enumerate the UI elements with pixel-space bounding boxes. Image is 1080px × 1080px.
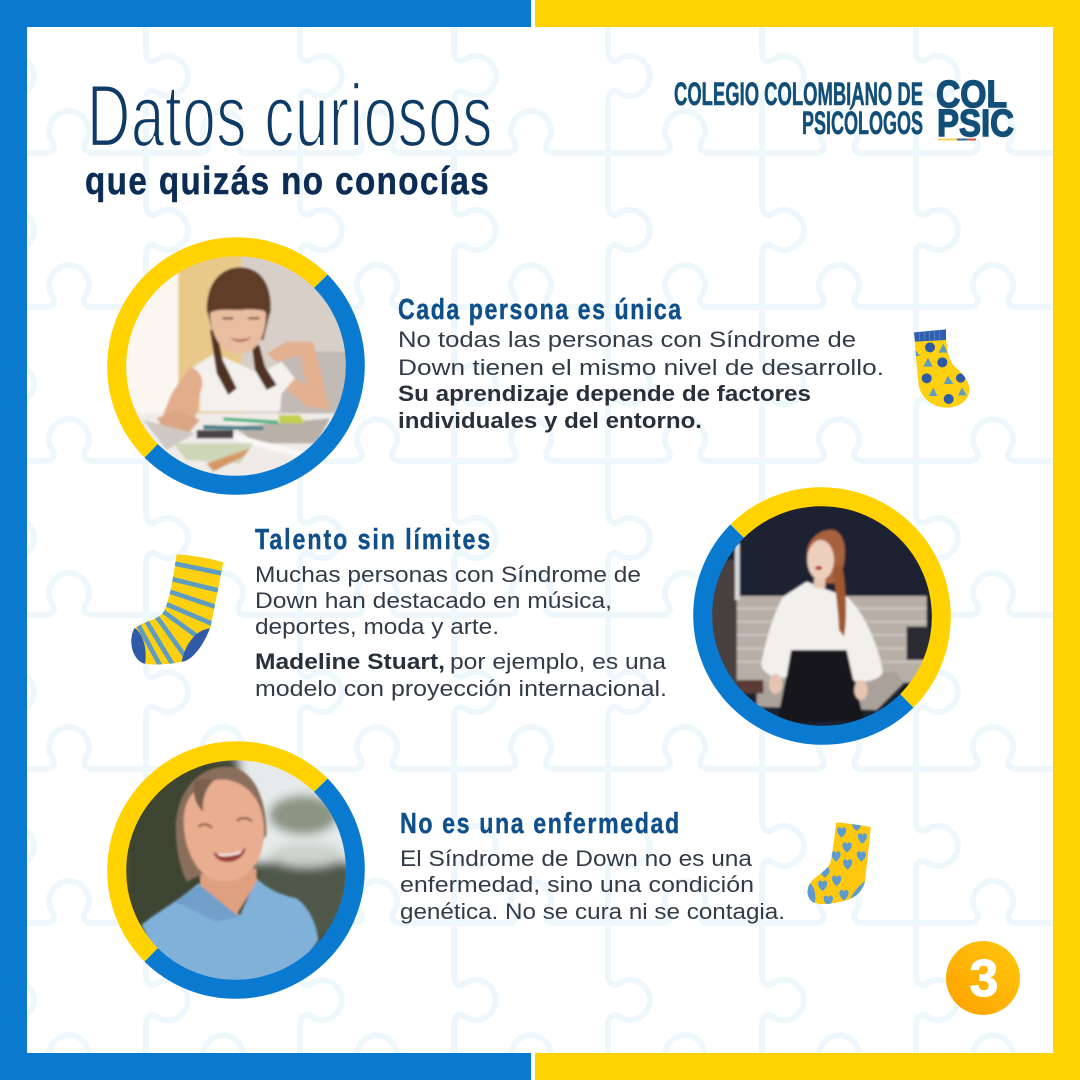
body text: deportes, moda y arte.	[255, 614, 499, 639]
ring	[117, 247, 355, 485]
right arm	[267, 342, 330, 410]
title line: que quizás no conocías: que quizás no conocías	[85, 158, 489, 203]
markers	[223, 417, 278, 424]
body text: El Síndrome de Down no es una	[400, 846, 753, 871]
body text	[255, 562, 667, 701]
face	[210, 303, 266, 354]
page number badge: 3	[970, 950, 998, 1008]
braids	[210, 330, 237, 395]
panel: no es una enfermedad	[117, 751, 872, 989]
hair	[207, 267, 271, 340]
body text: Down han destacado en música,	[255, 588, 612, 613]
body text: Su aprendizaje depende de factores	[398, 381, 811, 406]
shirt	[188, 353, 295, 412]
photo: Madeline Stuart on runway	[712, 506, 932, 726]
logo: Colegio Colombiano de Psicólogos: PSICÓLOGOS	[802, 105, 923, 141]
title	[85, 66, 492, 203]
face	[184, 779, 264, 882]
photo: smiling child in blue hoodie	[126, 760, 346, 980]
head	[807, 530, 845, 583]
hands	[769, 674, 782, 694]
body text	[398, 327, 884, 433]
hood	[142, 878, 318, 988]
heading: No es una enfermedad	[400, 806, 679, 840]
ring	[703, 497, 941, 735]
body text: por ejemplo, es una	[450, 649, 667, 674]
panel: cada persona es única	[117, 247, 969, 487]
body text: enfermedad, sino una condición	[400, 872, 754, 897]
body text: Madeline Stuart,	[255, 649, 445, 674]
logo: Colegio Colombiano de Psicólogos	[674, 74, 1014, 145]
logo: Colegio Colombiano de Psicólogos: COL	[936, 74, 1007, 116]
body text: Muchas personas con Síndrome de	[255, 562, 641, 587]
body text: genética. No se cura ni se contagia.	[400, 899, 785, 924]
panel: talento sin límites	[127, 497, 947, 735]
body text: modelo con proyección internacional.	[255, 676, 667, 701]
icon: sock with dots and triangles	[914, 329, 969, 408]
logo: Colegio Colombiano de Psicólogos: PSIC	[937, 103, 1014, 145]
icon: striped sock	[131, 554, 224, 664]
reaching arm	[158, 367, 202, 427]
neck	[200, 868, 257, 915]
icon: sock with hearts	[805, 821, 872, 906]
body text: individuales y del entorno.	[398, 408, 702, 433]
skirt	[777, 650, 864, 723]
braid	[834, 565, 846, 637]
photo: girl drawing at table	[126, 256, 346, 476]
body text: Down tienen el mismo nivel de desarrollo.	[398, 355, 884, 380]
heading: Talento sin límites	[255, 522, 490, 556]
blouse	[761, 582, 883, 682]
page number badge	[946, 941, 1020, 1015]
hair	[176, 767, 267, 882]
title line: Datos curiosos: Datos curiosos	[87, 66, 492, 165]
body text: No todas las personas con Síndrome de	[398, 327, 856, 352]
heading: Cada persona es única	[398, 292, 682, 326]
body text	[400, 846, 785, 924]
smile	[213, 848, 246, 862]
ring	[117, 751, 355, 989]
